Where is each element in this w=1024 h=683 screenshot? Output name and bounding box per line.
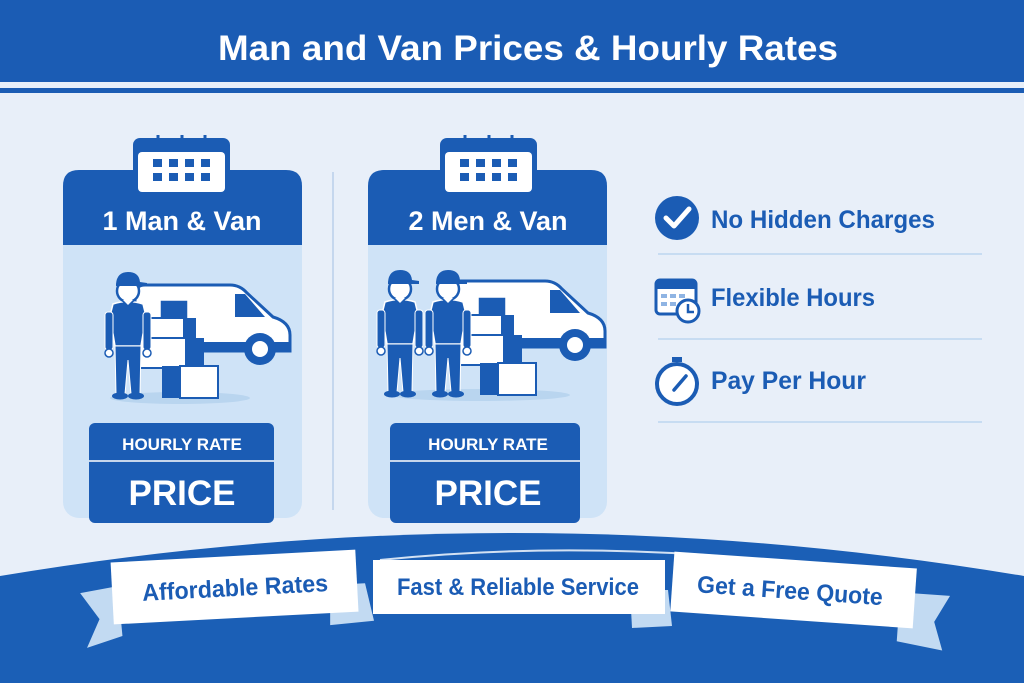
price box: PRICE	[435, 474, 541, 513]
icon: calendar	[440, 135, 537, 196]
illustration: man, van and boxes	[105, 272, 290, 404]
ribbon: Affordable Rates	[79, 549, 375, 648]
card heading: 2 Men & Van	[408, 206, 568, 236]
price box: HOURLY RATE	[122, 435, 242, 454]
ribbon: Get a Free Quote: Get a Free Quote	[696, 571, 884, 611]
title: Man and Van Prices & Hourly Rates	[218, 29, 838, 68]
price box: PRICE	[129, 474, 235, 513]
divider between cards	[332, 172, 334, 510]
feature: no hidden charges: No Hidden Charges	[711, 206, 935, 234]
feature list	[655, 196, 982, 422]
bottom arc	[0, 533, 1024, 683]
feature: pay per hour	[657, 357, 866, 404]
panel: 1 Man & Van	[63, 135, 302, 523]
price box	[89, 423, 274, 523]
feature: flexible hours: Flexible Hours	[711, 284, 875, 312]
card heading: 1 Man & Van	[102, 206, 262, 236]
ribbon: Get a Free Quote	[669, 552, 952, 651]
ribbon: Affordable Rates: Affordable Rates	[142, 570, 329, 607]
ribbon: Fast & Reliable Service: Fast & Reliable Service	[397, 574, 639, 601]
illustration: two men, van and boxes	[377, 270, 605, 401]
ribbon: Fast & Reliable Service	[373, 560, 672, 628]
price box	[390, 423, 580, 523]
icon: calendar	[133, 135, 230, 196]
price box: HOURLY RATE	[428, 435, 548, 454]
panel: 2 Men & Van	[368, 135, 607, 523]
feature: pay per hour: Pay Per Hour	[711, 367, 866, 395]
feature: no hidden charges	[655, 196, 935, 240]
feature: flexible hours	[656, 280, 875, 322]
header band	[0, 0, 1024, 93]
